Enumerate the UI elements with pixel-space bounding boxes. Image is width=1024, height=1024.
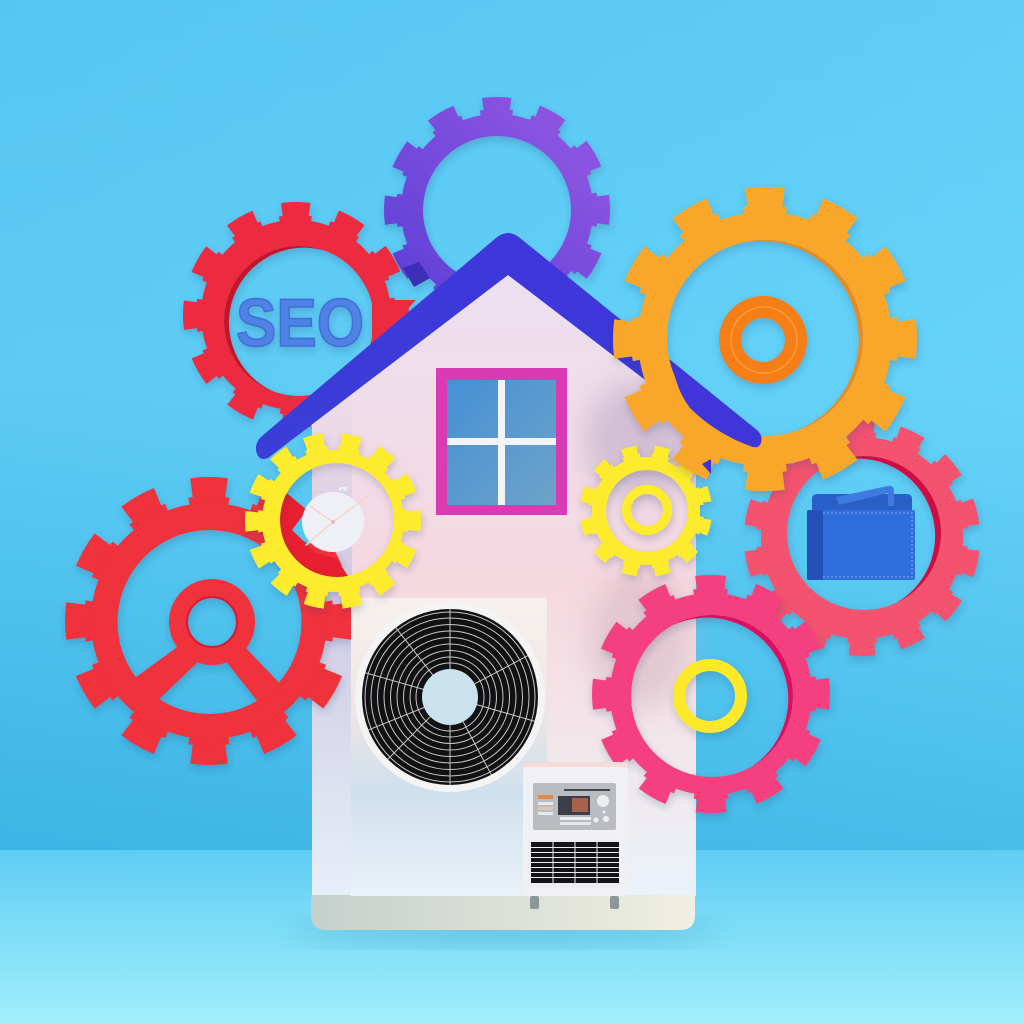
gear: big red with hub [78,490,340,752]
icon: blue briefcase [807,486,915,580]
gear: yellow right [573,438,719,584]
hub [730,307,796,373]
floor shadow [290,923,720,941]
floor [0,850,1024,1024]
window [436,368,567,515]
hub [178,588,246,656]
house wall [312,272,696,896]
outdoor unit controller [523,762,628,909]
gear: magenta bottom with yellow ring [601,584,823,804]
gear: yellow left [254,442,412,600]
SEO text: SEO [236,285,364,361]
spokes [132,645,284,707]
roof tip seen through orange gear [672,362,762,447]
house base slab [311,895,695,930]
gear: red SEO [192,211,416,419]
red wedge seen through yellow gear [278,490,348,582]
gear: coral right with briefcase [731,407,993,669]
mounting feet [530,896,539,909]
roof [256,233,762,459]
hub ring [626,490,668,530]
icon: white clock [302,487,368,552]
gear: orange with hub [626,200,904,478]
vent grille [528,839,620,888]
air conditioner panel [351,598,547,896]
gear: purple top [392,106,602,314]
yellow ring [679,665,741,727]
roof fragment below orange gear [702,459,711,474]
fan [355,602,545,792]
control panel [533,783,616,830]
